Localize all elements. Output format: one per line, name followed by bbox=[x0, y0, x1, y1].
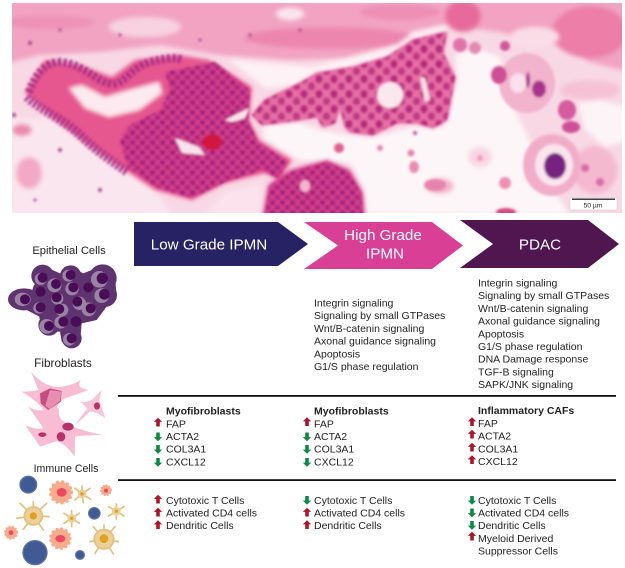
scale bar bbox=[570, 198, 617, 210]
fibroblast markers: High Grade: Myofibroblasts bbox=[314, 406, 389, 418]
pathways: PDAC: Signaling by small GTPases bbox=[478, 290, 609, 302]
immune markers: PDAC bbox=[468, 495, 569, 558]
pathways: PDAC: Apoptosis bbox=[478, 328, 524, 340]
chevron: High Grade IPMN: High Grade bbox=[344, 227, 422, 244]
fibroblast markers: PDAC: Inflammatory CAFs bbox=[478, 405, 574, 417]
immune markers: Low Grade: Dendritic Cells bbox=[166, 520, 234, 532]
chevron: Low Grade IPMN bbox=[134, 222, 308, 266]
fibroblast markers: High Grade bbox=[303, 406, 389, 468]
immune markers: High Grade: Cytotoxic T Cells bbox=[314, 495, 392, 507]
pathways: PDAC: SAPK/JNK signaling bbox=[478, 379, 573, 391]
pathways: PDAC: Integrin signaling bbox=[478, 278, 558, 290]
fibroblast markers: Low Grade: COL3A1 bbox=[166, 444, 206, 456]
scale bar: 50 µm bbox=[583, 202, 603, 210]
fibroblast markers: Low Grade: Myofibroblasts bbox=[166, 406, 241, 418]
immune markers: High Grade: Activated CD4 cells bbox=[314, 508, 405, 520]
immune markers: High Grade: Dendritic Cells bbox=[314, 520, 382, 532]
fibroblast markers: High Grade: ACTA2 bbox=[314, 431, 347, 443]
pathways: PDAC: Wnt/B-catenin signaling bbox=[478, 303, 588, 315]
pathways: PDAC bbox=[478, 278, 609, 391]
chevron: PDAC bbox=[460, 220, 619, 268]
dendritic cells bbox=[17, 486, 124, 554]
label: Epithelial Cells: Epithelial Cells bbox=[32, 245, 106, 257]
immune markers: Low Grade bbox=[154, 495, 257, 532]
chevron: Low Grade IPMN: Low Grade IPMN bbox=[151, 237, 267, 254]
fibroblast markers: Low Grade: CXCL12 bbox=[166, 456, 206, 468]
pathways: High Grade IPMN: Apoptosis bbox=[314, 348, 360, 360]
immune markers: High Grade bbox=[303, 495, 405, 532]
immune markers: PDAC: Myeloid Derived bbox=[478, 533, 553, 545]
histology photo bbox=[0, 0, 625, 220]
chevron: High Grade IPMN bbox=[304, 222, 463, 269]
fibroblast markers: PDAC: ACTA2 bbox=[478, 431, 511, 443]
fibroblast markers: PDAC: CXCL12 bbox=[478, 456, 518, 468]
label: Immune Cells: Immune Cells bbox=[34, 463, 98, 475]
fibroblast markers: Low Grade: FAP bbox=[166, 418, 186, 430]
pathways: High Grade IPMN: Axonal guidance signaling bbox=[314, 336, 436, 348]
pathways: PDAC: Axonal guidance signaling bbox=[478, 316, 600, 328]
pathways: High Grade IPMN: Signaling by small GTPases bbox=[314, 310, 445, 322]
orange activated cells bbox=[5, 482, 111, 548]
pathways: High Grade IPMN: Integrin signaling bbox=[314, 298, 394, 310]
chevron: High Grade IPMN: IPMN bbox=[366, 246, 404, 262]
pathways: High Grade IPMN bbox=[314, 298, 445, 373]
label: Fibroblasts: Fibroblasts bbox=[34, 356, 92, 370]
immune markers: Low Grade: Cytotoxic T Cells bbox=[166, 495, 244, 507]
immune markers: Low Grade: Activated CD4 cells bbox=[166, 508, 257, 520]
fibroblast markers: High Grade: FAP bbox=[314, 418, 334, 430]
immune markers: PDAC: Activated CD4 cells bbox=[478, 508, 569, 520]
pathways: High Grade IPMN: Wnt/B-catenin signaling bbox=[314, 323, 424, 335]
fibroblast markers: Low Grade bbox=[154, 406, 241, 468]
pathways: PDAC: DNA Damage response bbox=[478, 354, 588, 366]
fibroblast markers: Low Grade: ACTA2 bbox=[166, 431, 199, 443]
fibroblast markers: PDAC bbox=[468, 405, 574, 468]
fibroblast markers: High Grade: CXCL12 bbox=[314, 456, 354, 468]
pathways: High Grade IPMN: G1/S phase regulation bbox=[314, 361, 419, 373]
fibroblast markers: PDAC: FAP bbox=[478, 418, 498, 430]
fibroblast markers: PDAC: COL3A1 bbox=[478, 443, 518, 455]
icon: epithelial cell cluster bbox=[8, 264, 117, 348]
immune markers: PDAC: Cytotoxic T Cells bbox=[478, 495, 556, 507]
icon: fibroblasts bbox=[22, 372, 105, 457]
pathways: PDAC: G1/S phase regulation bbox=[478, 341, 583, 353]
immune markers: PDAC: Dendritic Cells bbox=[478, 520, 546, 532]
pathways: PDAC: TGF-B signaling bbox=[478, 366, 554, 378]
blue lymphocytes bbox=[20, 476, 100, 565]
icon: immune cells bbox=[5, 476, 124, 565]
immune markers: PDAC: Suppressor Cells bbox=[478, 546, 558, 558]
chevron: PDAC: PDAC bbox=[519, 236, 561, 254]
fibroblast markers: High Grade: COL3A1 bbox=[314, 444, 354, 456]
